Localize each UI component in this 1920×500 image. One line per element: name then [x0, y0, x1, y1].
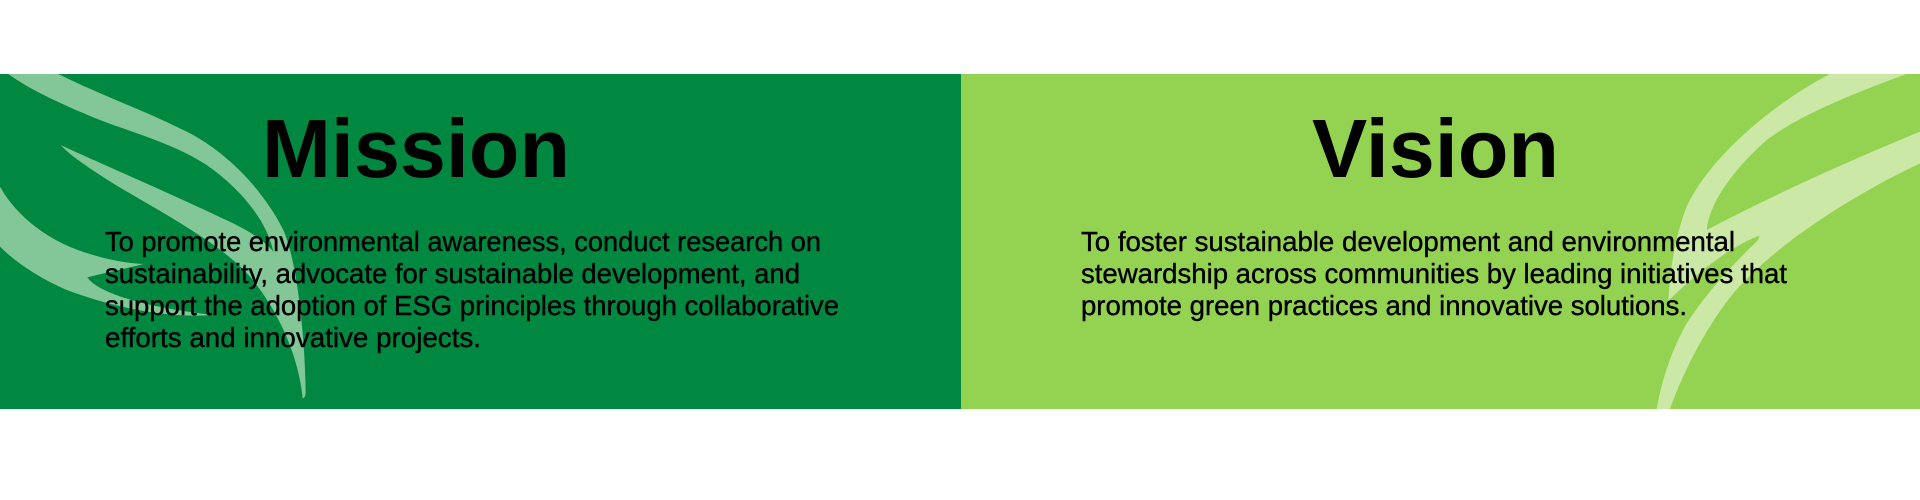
mission background [0, 74, 961, 409]
panel: mission [0, 74, 961, 409]
vision background [961, 74, 1920, 409]
text block: mission statement: support the adoption of ESG principles through collaborative [105, 290, 839, 321]
text block: vision statement [1081, 226, 1787, 321]
text block: mission statement [105, 226, 839, 353]
text block: mission statement: To promote environmental awareness, conduct research on [105, 226, 821, 257]
panel: vision [961, 74, 1920, 409]
heading: Vision: Vision [1312, 102, 1559, 195]
text block: mission statement: sustainability, advocate for sustainable development, and [105, 258, 800, 289]
text block: vision statement: stewardship across communities by leading initiatives that [1081, 258, 1787, 289]
text block: mission statement: efforts and innovative projects. [105, 322, 481, 353]
heading: Mission: Mission [262, 102, 570, 195]
text block: vision statement: To foster sustainable development and environmental [1081, 226, 1735, 257]
icon: mission leaf watermark [0, 74, 306, 398]
text block: vision statement: promote green practices and innovative solutions. [1081, 290, 1687, 321]
icon: vision leaf watermark [1657, 74, 1920, 409]
